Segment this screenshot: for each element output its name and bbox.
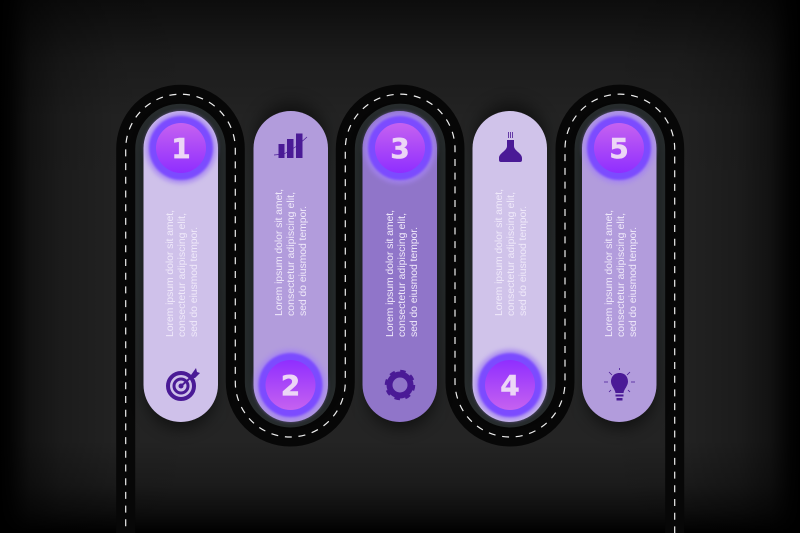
- panel 4 text: consectetur adipiscing elit,: [505, 192, 517, 316]
- inner road shoulders: [135, 104, 665, 430]
- panel 2: [254, 103, 328, 422]
- number badge 1: 1: [171, 132, 191, 165]
- icon: target: [168, 368, 200, 399]
- panel 2 text: [273, 189, 309, 316]
- number badge 5: [583, 112, 655, 184]
- panel 5 text: consectetur adipiscing elit,: [615, 213, 627, 337]
- panel 5 text: Lorem ipsum dolor sit amet,: [603, 210, 615, 337]
- panel 3 text: consectetur adipiscing elit,: [396, 213, 408, 337]
- panel 1 text: [164, 210, 200, 337]
- panel 1 text: consectetur adipiscing elit,: [176, 213, 188, 337]
- panel 1: [144, 111, 218, 428]
- panel 4 text: sed do eiusmod tempor.: [517, 206, 529, 316]
- number badge 3: 3: [390, 132, 410, 165]
- panel 2 text: consectetur adipiscing elit,: [285, 192, 297, 316]
- number badge 5: 5: [609, 132, 629, 165]
- number badge 4: 4: [500, 369, 520, 402]
- panel 5 text: sed do eiusmod tempor.: [627, 227, 639, 337]
- panel 2 text: sed do eiusmod tempor.: [297, 206, 309, 316]
- panel 3 text: [384, 210, 420, 337]
- icon: flask: [499, 132, 522, 162]
- number badge 2: [254, 349, 326, 421]
- panel 4 text: Lorem ipsum dolor sit amet,: [493, 189, 505, 316]
- panel 1 text: sed do eiusmod tempor.: [188, 227, 200, 337]
- icon: gear: [386, 372, 414, 398]
- panel 3 text: sed do eiusmod tempor.: [408, 227, 420, 337]
- panel 3 text: Lorem ipsum dolor sit amet,: [384, 210, 396, 337]
- panel 1 text: Lorem ipsum dolor sit amet,: [164, 210, 176, 337]
- panel 3: [362, 111, 437, 428]
- panel 4 text: [493, 189, 529, 316]
- winding road: [126, 94, 675, 533]
- number badge 1: [145, 112, 217, 184]
- panel 5 text: [603, 210, 639, 337]
- number badge 2: 2: [281, 369, 300, 402]
- panel 5: [582, 111, 656, 428]
- number badge 3: [364, 112, 436, 184]
- icon: light bulb: [604, 368, 635, 400]
- panel 2 text: Lorem ipsum dolor sit amet,: [273, 189, 285, 316]
- panel 4: [472, 103, 547, 422]
- number badge 4: [474, 349, 546, 421]
- icon: bar chart: [274, 134, 307, 158]
